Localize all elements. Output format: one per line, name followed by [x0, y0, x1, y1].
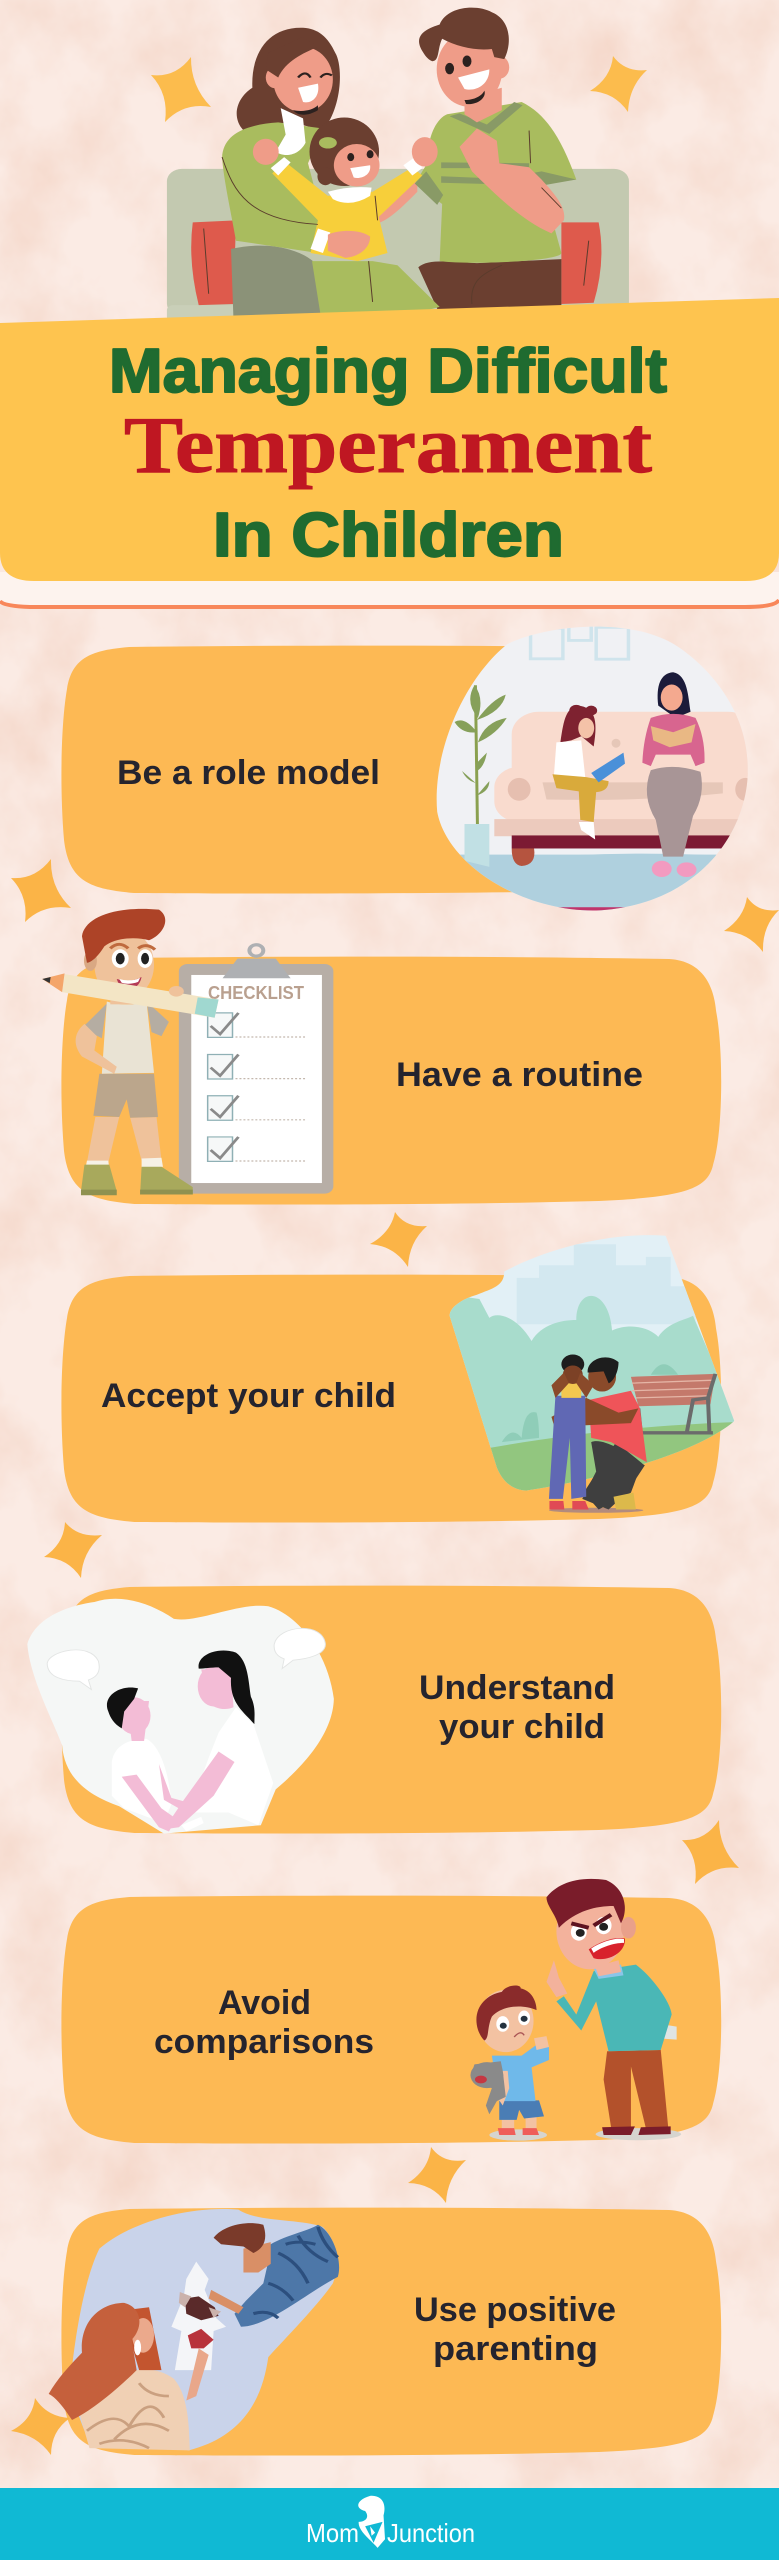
logo wordmark: Junction: Junction	[387, 2518, 475, 2548]
illustration: angry father and son	[470, 1879, 681, 2141]
card	[61, 957, 721, 1205]
illustration: parents solving puzzle	[49, 2209, 339, 2450]
star decoration	[11, 2398, 70, 2455]
panel: accept your child	[61, 1227, 740, 1523]
label	[419, 1669, 615, 1746]
label: parenting	[433, 2330, 598, 2368]
logo wordmark: Mom: Mom	[306, 2518, 359, 2548]
title banner	[0, 298, 779, 581]
underline below banner	[0, 572, 779, 607]
title line 3: In Children	[213, 501, 564, 570]
mother	[222, 28, 365, 320]
title line 2: Temperament	[124, 402, 652, 490]
card	[61, 646, 666, 894]
label	[154, 1984, 374, 2061]
panel: understand your child	[27, 1586, 721, 1834]
hero illustration: family on sofa	[167, 8, 629, 322]
star decoration	[408, 2147, 466, 2203]
orange rule	[0, 600, 779, 607]
star decoration	[724, 897, 779, 952]
card	[61, 1275, 721, 1523]
illustration: parent comforting child in park	[442, 1227, 740, 1513]
hairlines	[204, 131, 589, 304]
label: comparisons	[154, 2023, 374, 2061]
checklist heading: CHECKLIST	[208, 983, 304, 1003]
star decoration: hero left	[151, 57, 211, 122]
logo icon	[358, 2496, 385, 2548]
star decoration	[370, 1212, 427, 1267]
star decoration	[44, 1522, 102, 1578]
footer bar	[0, 2488, 779, 2560]
label: Accept your child	[101, 1377, 396, 1415]
star decoration: hero right	[590, 56, 647, 112]
panel: be a role model	[61, 612, 755, 916]
card	[61, 2208, 721, 2456]
star decoration	[11, 859, 71, 922]
label: Have a routine	[396, 1056, 643, 1094]
label: your child	[439, 1708, 605, 1746]
illustration: checklist clipboard	[179, 945, 333, 1194]
panel: avoid comparisons	[61, 1879, 721, 2144]
title line 1: Managing Difficult	[109, 337, 667, 406]
label: Use positive	[414, 2291, 616, 2329]
sofa	[167, 169, 629, 322]
label: Understand	[419, 1669, 615, 1707]
label: Be a role model	[117, 754, 380, 792]
card	[61, 1896, 721, 2144]
panel: have a routine	[42, 909, 721, 1205]
illustration: boy with pencil	[42, 909, 219, 1195]
label	[414, 2291, 616, 2368]
illustration: mother and daughter reading	[436, 626, 748, 910]
label: Avoid	[218, 1984, 311, 2022]
card	[61, 1586, 721, 1834]
father	[375, 8, 576, 314]
star decoration	[682, 1820, 739, 1884]
illustration: mother and child talking	[27, 1599, 334, 1834]
panel: use positive parenting	[11, 2208, 721, 2456]
child	[253, 118, 440, 314]
